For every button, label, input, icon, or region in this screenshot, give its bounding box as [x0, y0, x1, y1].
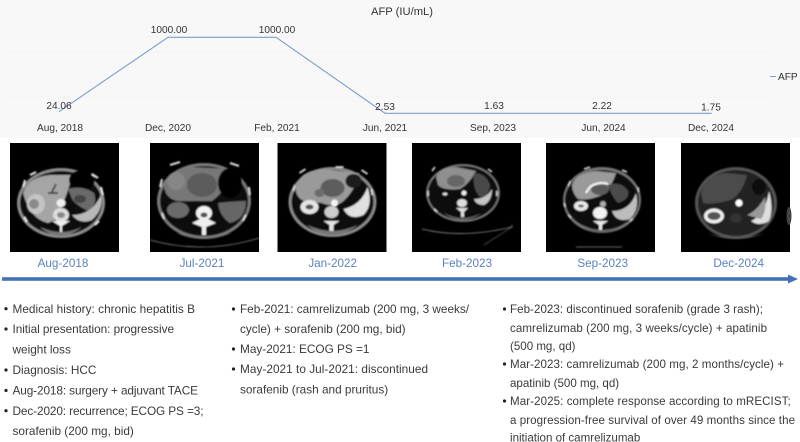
text block: history and initial treatment: Aug-2018: surgery + adjuvant TACE	[12, 384, 198, 398]
CT scan: Sep-2023	[546, 143, 655, 252]
time axis labels: Feb, 2021	[254, 123, 300, 134]
text block: 2023 to 2025 treatment and outcome	[503, 304, 795, 442]
text block: history and initial treatment	[4, 302, 204, 438]
text block: 2021 treatment: Feb-2021: camrelizumab (200 mg, 3 weeks/	[240, 302, 470, 316]
scan date captions: Dec-2024	[713, 257, 765, 270]
time axis labels: Sep, 2023	[470, 123, 516, 134]
CT scan: Feb-2023	[412, 143, 521, 252]
time axis labels: Jun, 2024	[581, 123, 626, 134]
CT scan: Jan-2022	[278, 143, 386, 252]
text block: history and initial treatment: Medical history: chronic hepatitis B	[12, 302, 195, 316]
text block: 2021 treatment: cycle) + sorafenib (200 mg, bid)	[240, 322, 406, 336]
chart title: AFP (IU/mL)	[371, 6, 433, 18]
text block: 2023 to 2025 treatment and outcome: (500 mg, qd)	[510, 341, 576, 353]
data value labels: 1.75	[701, 102, 721, 114]
data value labels: 1000.00	[259, 25, 296, 36]
time axis labels: Aug, 2018	[37, 123, 83, 134]
MRI scan: Dec-2024	[681, 143, 792, 252]
panel: AFP line chart	[0, 0, 800, 138]
CT scan: Aug-2018	[10, 143, 119, 252]
data value labels: 2.53	[375, 102, 395, 113]
text block: 2021 treatment	[232, 302, 470, 396]
scan date captions: Sep-2023	[577, 257, 628, 270]
text block: 2023 to 2025 treatment and outcome: apatinib (500 mg, qd)	[510, 378, 619, 390]
arrow: timeline	[2, 274, 798, 284]
time axis labels: Dec, 2024	[688, 123, 734, 134]
scan date captions: Jul-2021	[180, 257, 224, 270]
data value labels: 1.63	[484, 101, 504, 112]
scan date captions	[38, 257, 765, 270]
AFP data line	[59, 37, 712, 113]
text block: 2021 treatment: May-2021 to Jul-2021: discontinued	[240, 362, 428, 376]
CT scan: Jul-2021	[150, 143, 259, 252]
text block: 2021 treatment: sorafenib (rash and pruritus)	[240, 382, 388, 396]
text block: 2021 treatment: May-2021: ECOG PS =1	[240, 342, 370, 356]
text block: history and initial treatment: sorafenib (200 mg, bid)	[12, 424, 134, 438]
text block: 2023 to 2025 treatment and outcome: camrelizumab (200 mg, 3 weeks/cycle) + apatinib	[510, 323, 767, 335]
text block: 2023 to 2025 treatment and outcome: Mar-2025: complete response according to mRECIST;	[510, 396, 791, 408]
time axis labels	[37, 123, 734, 134]
text block: history and initial treatment: Dec-2020: recurrence; ECOG PS =3;	[12, 404, 204, 418]
data value labels: 24.06	[46, 101, 72, 112]
data value labels	[46, 25, 721, 114]
data value labels: 1000.00	[151, 25, 188, 36]
time axis labels: Dec, 2020	[145, 123, 191, 134]
text block: 2023 to 2025 treatment and outcome: a progression-free survival of over 49 months since the	[510, 415, 795, 427]
time axis labels: Jun, 2021	[363, 123, 408, 134]
data value labels: 2.22	[592, 101, 612, 112]
text block: history and initial treatment: weight loss	[12, 343, 71, 357]
text block: 2023 to 2025 treatment and outcome: Feb-2023: discontinued sorafenib (grade 3 rash);	[510, 304, 763, 316]
legend: AFP	[778, 72, 798, 83]
scan date captions: Jan-2022	[308, 257, 357, 270]
text block: 2023 to 2025 treatment and outcome: Mar-2023: camrelizumab (200 mg, 2 months/cycle) +	[510, 359, 784, 371]
scan date captions: Feb-2023	[442, 257, 492, 270]
text block: history and initial treatment: Diagnosis: HCC	[12, 363, 97, 377]
text block: history and initial treatment: Initial presentation: progressive	[12, 322, 174, 336]
scan date captions: Aug-2018	[38, 257, 88, 270]
